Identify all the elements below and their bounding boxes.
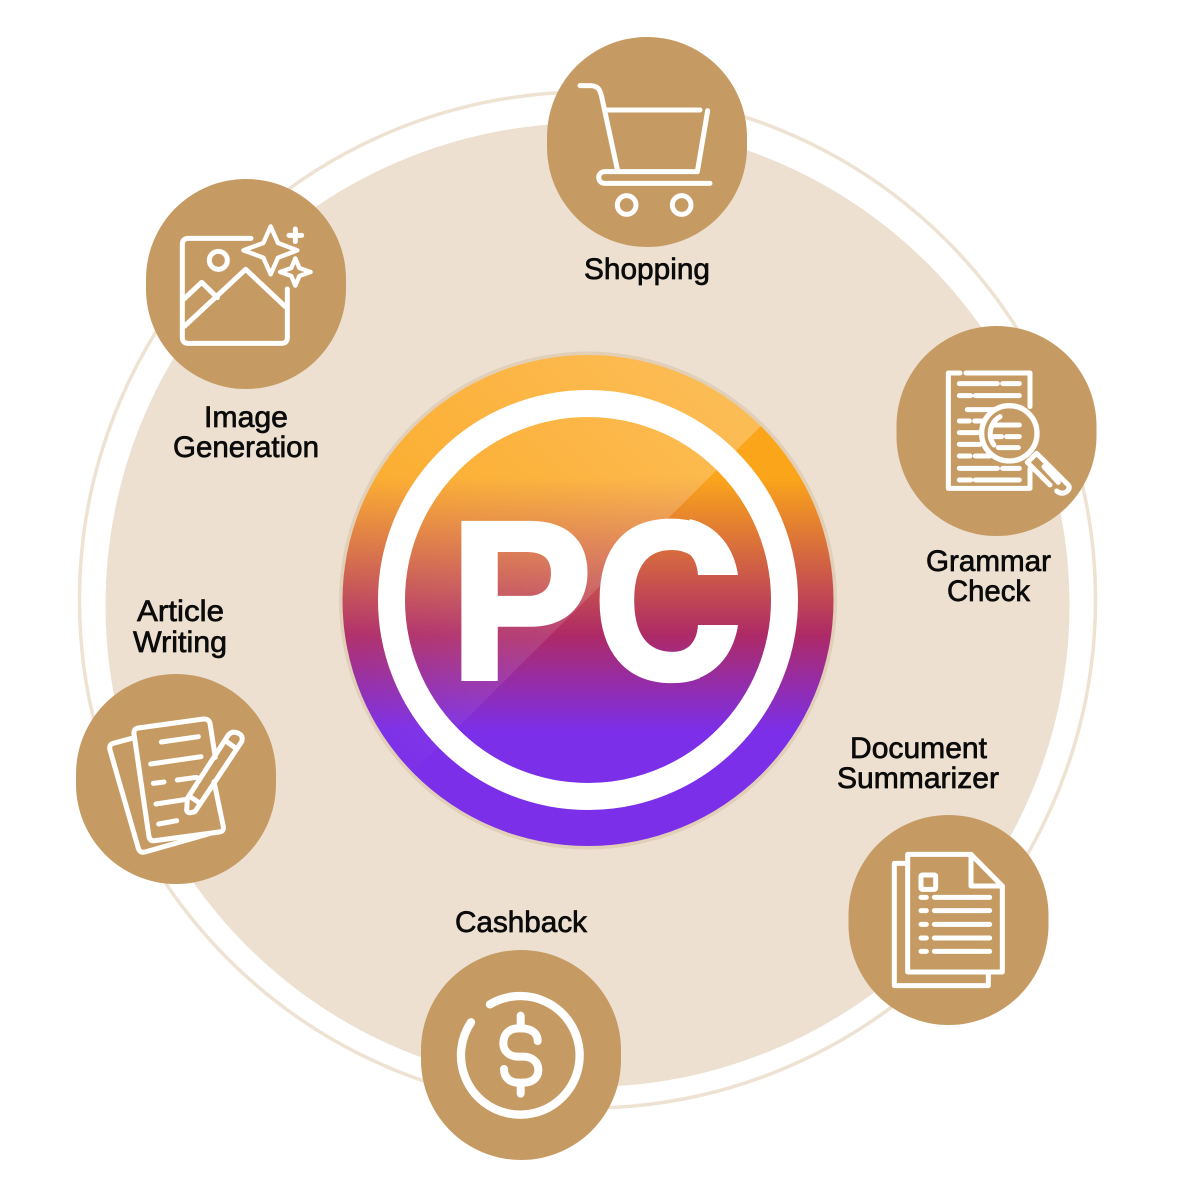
logo halo [339, 352, 837, 850]
logo white ring [392, 404, 784, 796]
node: grammar check [896, 326, 1096, 608]
logo letters: P [450, 476, 592, 726]
shopping badge [547, 37, 747, 247]
icon: document with magnifier [948, 373, 1069, 493]
image generation label [173, 401, 319, 464]
node: image generation [146, 179, 346, 464]
cashback label: Cashback [455, 906, 588, 939]
background disc [106, 123, 1070, 1087]
image generation label: Generation [173, 431, 319, 464]
grammar check label: Check [947, 575, 1031, 608]
image generation label: Image [204, 401, 288, 434]
icon: dollar coin [461, 996, 580, 1115]
document summarizer badge [848, 815, 1048, 1025]
image generation badge [146, 179, 346, 389]
article writing badge [76, 674, 276, 884]
grammar check badge [896, 326, 1096, 536]
document summarizer label: Summarizer [837, 762, 999, 795]
grammar check label [926, 545, 1051, 608]
shopping label: Shopping [584, 253, 710, 286]
logo gradient disc [342, 355, 834, 846]
document summarizer label: Document [850, 732, 988, 765]
logo letters: C [594, 476, 740, 726]
icon: papers and pencil [110, 719, 242, 852]
icon: image with sparkles [182, 226, 311, 343]
icon: shopping cart [580, 86, 710, 214]
node: shopping [547, 37, 747, 286]
icon: document stack [894, 854, 1002, 986]
grammar check label: Grammar [926, 545, 1051, 578]
article writing label: Article [137, 595, 224, 628]
article writing label [133, 595, 227, 659]
cashback badge [421, 950, 621, 1160]
logo letters [461, 518, 738, 684]
node: document summarizer [837, 732, 1048, 1025]
center PC logo [339, 352, 837, 850]
node: cashback [421, 906, 621, 1160]
outer ring [80, 92, 1096, 1108]
article writing label: Writing [133, 626, 227, 659]
document summarizer label [837, 732, 999, 795]
node: article writing [76, 595, 276, 884]
logo gloss [342, 355, 761, 727]
